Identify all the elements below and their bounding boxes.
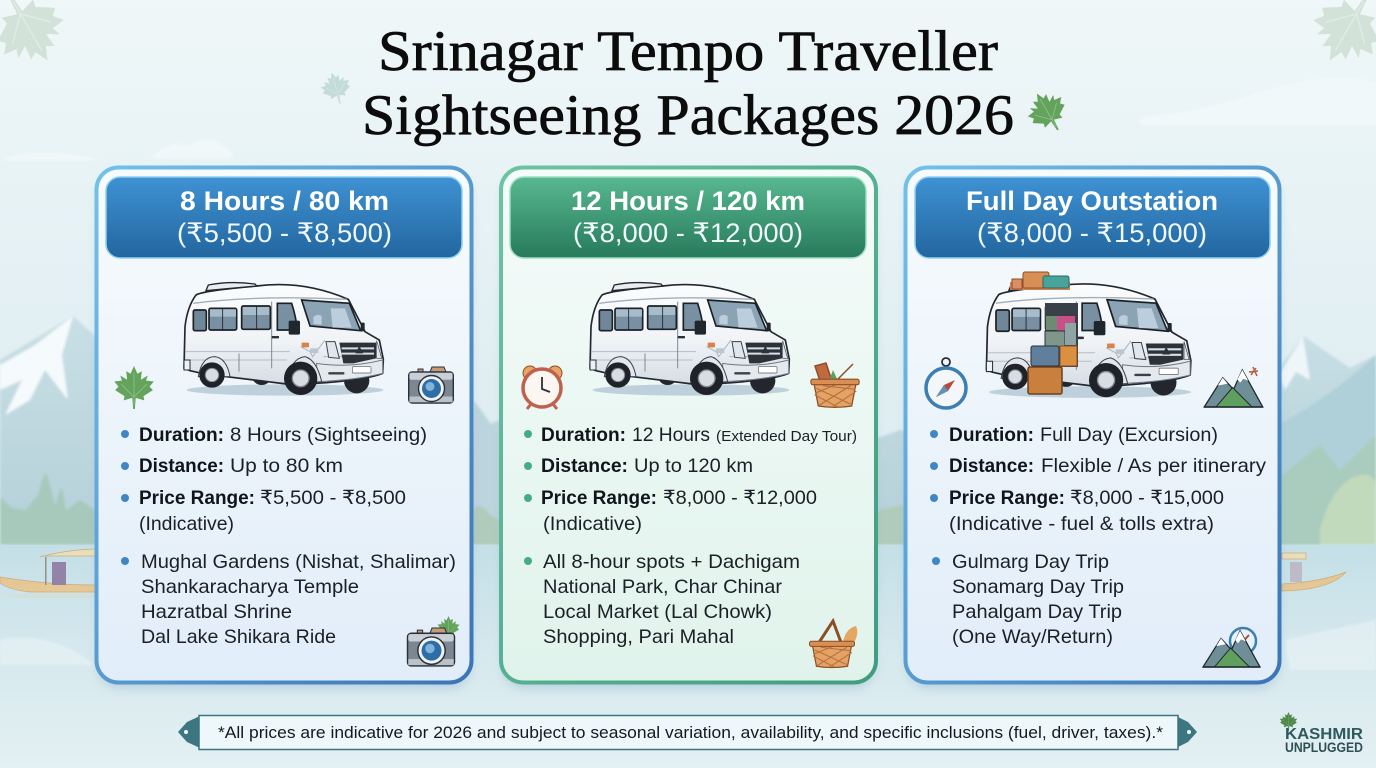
details list: National Park, Char Chinar [543,576,783,598]
details list: Up to 120 km [634,455,753,477]
icon: alarm clock [523,366,562,409]
logo: Kashmir Unplugged [1280,712,1363,755]
details list: Distance: [541,455,628,477]
details list: Shopping, Pari Mahal [543,626,734,648]
icon: camera with leaf [408,616,460,666]
logo: Kashmir Unplugged: UNPLUGGED [1285,740,1363,755]
details list: Price Range: [541,487,657,509]
panel shadows [98,175,1279,689]
details list: Mughal Gardens (Nishat, Shalimar) [141,551,456,573]
details list: 12 Hours [632,424,710,446]
details list: Dal Lake Shikara Ride [141,626,336,648]
details list: Gulmarg Day Trip [952,551,1109,573]
details list: Duration: [541,424,626,446]
details list: Duration: [949,424,1034,446]
icon: camera [409,367,453,403]
header: 8 hours price: (₹5,500 - ₹8,500) [177,218,392,248]
details list: (Indicative) [139,513,234,535]
details list: Price Range: [949,487,1065,509]
corner leaf top left [0,0,77,78]
van illustration [590,283,789,396]
icon: maple leaf [114,366,154,409]
pale leaf near title [318,69,354,107]
details list: Distance: [949,455,1034,477]
panel: 8 hours package [96,168,472,682]
details list: All 8-hour spots + Dachigam [543,551,800,573]
details list: (One Way/Return) [952,626,1113,648]
details list: Local Market (Lal Chowk) [543,601,772,623]
details list: 8 Hours (Sightseeing) [230,424,427,446]
details list: Shankaracharya Temple [141,576,359,598]
footer note banner [178,716,1197,750]
details list: ₹8,000 - ₹12,000 [663,487,817,509]
details list: (Indicative) [543,513,642,535]
details list: (Extended Day Tour) [716,428,857,445]
panel: 12 hours package [501,168,876,682]
details list: ₹8,000 - ₹15,000 [1070,487,1224,509]
details list [524,424,857,648]
open door with bags [1028,303,1078,394]
details list: Up to 80 km [230,455,343,477]
details list: Distance: [139,455,224,477]
header: full day price [915,177,1270,258]
corner leaf top right [1300,0,1376,78]
details list [930,424,1266,648]
title: Srinagar Tempo Traveller [378,20,998,83]
logo: Kashmir Unplugged: KASHMIR [1285,726,1363,743]
icon: picnic basket [811,363,859,407]
details list: Sonamarg Day Trip [952,576,1124,598]
header: 8 hours price [106,177,462,258]
header: 12 hours price: 12 Hours / 120 km [571,186,805,216]
details list: ₹5,500 - ₹8,500 [260,487,406,509]
roof luggage [1010,272,1070,290]
panel: full day outstation package [906,168,1280,682]
details list: Flexible / As per itinerary [1041,455,1266,477]
details list: Full Day (Excursion) [1040,424,1218,446]
shikara boat right [1282,553,1346,591]
details list: Pahalgam Day Trip [952,601,1122,623]
van with luggage illustration [986,272,1191,398]
header: 8 hours price: 8 Hours / 80 km [180,186,389,216]
icon: compass [926,358,966,408]
header: 12 hours price [510,177,866,258]
footer note banner: *All prices are indicative for 2026 and subject to seasonal variation, availability, and specific inclusions (fuel, driver, taxes).* [218,724,1164,742]
shikara boat left [0,549,95,598]
header: full day price: (₹8,000 - ₹15,000) [977,218,1207,248]
icon: bread basket [810,621,857,668]
title: Sightseeing Packages 2026 [362,84,1014,147]
details list: (Indicative - fuel & tolls extra) [949,513,1214,535]
title [362,20,1014,147]
details list: Duration: [139,424,224,446]
header: 12 hours price: (₹8,000 - ₹12,000) [573,218,803,248]
header: full day price: Full Day Outstation [966,186,1218,216]
van illustration [184,283,383,396]
icon: mountains and compass [1203,628,1260,667]
green leaf near title [1020,84,1075,140]
details list [121,424,456,648]
icon: mountains with star [1204,367,1263,407]
details list: Hazratbal Shrine [141,601,292,623]
details list: Price Range: [139,487,255,509]
